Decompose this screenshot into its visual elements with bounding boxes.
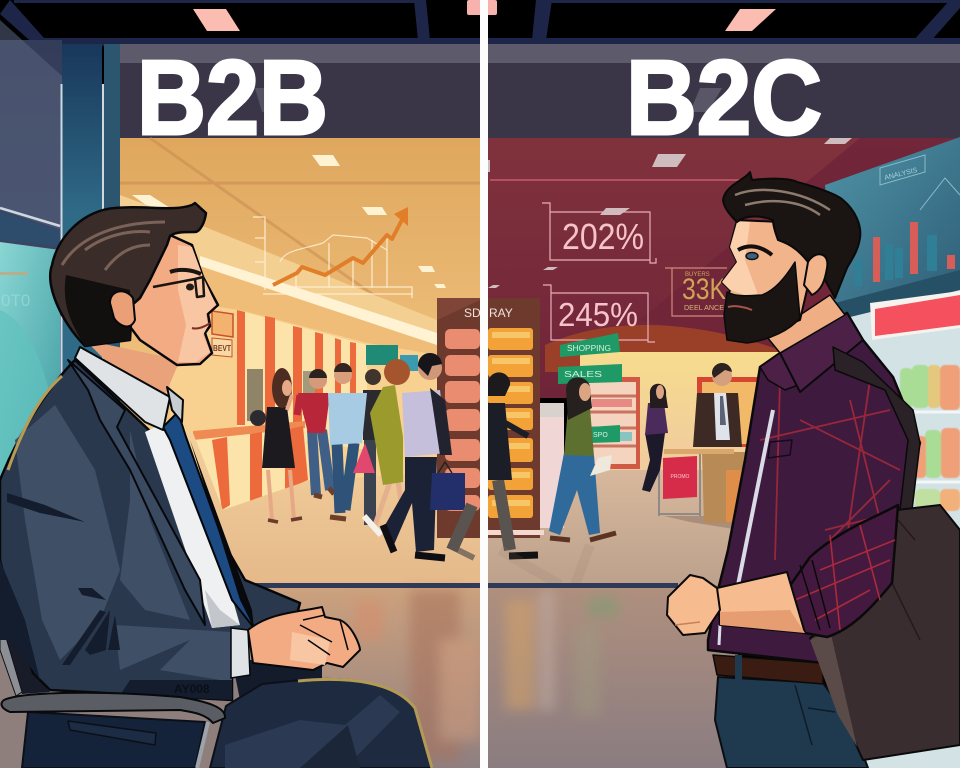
- man in light blue shirt: [328, 363, 367, 519]
- eye: [746, 252, 758, 260]
- floor: [120, 430, 480, 585]
- small shop sign lower: [212, 338, 232, 357]
- green tag 1: [560, 333, 620, 357]
- stand heading right: RAY: [489, 306, 513, 320]
- red promo stand: PROMO: [671, 474, 690, 480]
- woman in black dress: [250, 368, 302, 522]
- collar: [760, 353, 798, 390]
- plaid lines: [760, 320, 905, 620]
- ceiling light left: [193, 9, 240, 31]
- ear: [804, 254, 827, 295]
- mouth: [192, 323, 210, 329]
- jacket highlight shapes: [15, 405, 232, 682]
- seat lower: [22, 712, 205, 768]
- hair: [723, 172, 860, 298]
- stand heading left: SD: [464, 306, 481, 320]
- arched store soffit: [545, 325, 780, 372]
- green tag 2: SALES: [564, 370, 602, 379]
- stat box 245%: 245%: [558, 296, 638, 333]
- man in brown suit: [693, 363, 742, 447]
- stat box 202%: [542, 203, 656, 263]
- shirt torso: [708, 313, 920, 663]
- reception counter: [193, 423, 310, 510]
- green tag 2: [558, 364, 622, 384]
- sleeve: [787, 505, 898, 637]
- stat box 33K: DEEL ANCE: [684, 305, 724, 312]
- panel: left wall and window: [0, 20, 120, 768]
- woman in purple top: [642, 384, 668, 492]
- ceiling light right: [725, 9, 776, 31]
- chair back pad: [0, 555, 50, 694]
- blue column: [62, 44, 102, 604]
- beard: [724, 262, 800, 343]
- green tag 1: SHOPPING: [567, 344, 611, 353]
- panel: header sign strip: [120, 44, 960, 138]
- shoulder gold edge: [8, 376, 62, 470]
- ceiling light centre: [467, 0, 497, 15]
- lapel: [68, 360, 205, 625]
- ear: [110, 291, 135, 326]
- woman in olive top: [549, 377, 616, 540]
- hair: [50, 203, 206, 346]
- ceiling lamps: [486, 138, 852, 288]
- cuff: [231, 628, 250, 678]
- window faint digits: 0T0: [1, 291, 30, 310]
- ceiling beams: [120, 138, 480, 345]
- floor reflection panel left: [220, 585, 480, 768]
- jacket shadow folds: [0, 493, 232, 700]
- woman in olive dress: [353, 359, 410, 535]
- eye: [186, 284, 194, 290]
- ceiling: [120, 138, 480, 438]
- floor reflection panel right: [488, 545, 738, 768]
- man in lilac shirt with bag: [383, 353, 465, 558]
- heading: B2C: B2C: [626, 39, 822, 157]
- face: [125, 235, 218, 365]
- soffit underside: [120, 238, 480, 368]
- trousers: [715, 677, 868, 768]
- display stand with products: [437, 298, 544, 538]
- panel: B2B store interior: [120, 138, 480, 585]
- shoppers: B2B side: [250, 353, 465, 558]
- ceiling: [488, 138, 960, 398]
- screen with bar chart: ANALYSIS: [884, 167, 919, 182]
- column side strip: [104, 44, 120, 604]
- product rows left: [445, 329, 480, 511]
- stat box 202%: 202%: [562, 216, 644, 257]
- peach soffit band: [120, 195, 480, 352]
- booth dark doors: [247, 369, 263, 421]
- chest pocket: [768, 440, 792, 458]
- shoppers: B2C side: [448, 363, 742, 558]
- red promo stand: [659, 450, 740, 530]
- walker in dark jacket: [448, 372, 538, 558]
- green tag 3: [590, 425, 620, 443]
- stat box 245%: [543, 285, 655, 342]
- trousers: [210, 679, 432, 768]
- bag: [810, 505, 960, 760]
- armrest: [2, 693, 225, 723]
- shelf band: [835, 270, 960, 322]
- shirt collar: [75, 347, 183, 430]
- bright soffit stripe: [200, 256, 480, 356]
- line chart with rising arrow: [253, 207, 413, 298]
- shoulder bag strap: [833, 347, 920, 510]
- necktie: [163, 412, 254, 628]
- stat box 33K: [665, 268, 727, 316]
- glasses: [153, 277, 204, 297]
- stat box 33K: 33K: [682, 273, 726, 306]
- cardboard box counter: [664, 449, 746, 523]
- screen with bar chart: [825, 137, 960, 305]
- green tag 3: SPO: [593, 432, 608, 439]
- forearm: [717, 572, 805, 633]
- fist: [667, 575, 720, 635]
- refrigerated shelves: [838, 290, 960, 768]
- floor: [488, 470, 748, 585]
- ceiling lamps: [132, 155, 446, 288]
- dark lap behind hands: [232, 660, 322, 700]
- face: [722, 220, 815, 340]
- belt: [713, 655, 823, 684]
- neck: [767, 295, 845, 353]
- clasped hands: [248, 607, 360, 670]
- character: bearded man with bag: [667, 172, 960, 768]
- eyebrow: [170, 270, 201, 274]
- shelves right: [697, 377, 767, 447]
- lips: [728, 306, 752, 310]
- small shop sign upper: [212, 311, 233, 337]
- small shop sign lower: BEVT: [213, 344, 231, 353]
- display kiosk: [540, 403, 564, 528]
- man in red shirt: [297, 369, 334, 497]
- lit store back wall: [580, 352, 780, 482]
- eyebrow: [738, 246, 772, 255]
- heading: B2B: B2B: [137, 39, 328, 157]
- panel: top ceiling frame: [0, 0, 960, 46]
- chair back frame: [0, 617, 22, 696]
- floor edge line: [240, 583, 678, 588]
- shelves left: [583, 377, 640, 469]
- character: businessman: [0, 203, 432, 768]
- booth wall and columns: [237, 310, 367, 450]
- product rows right: [488, 328, 533, 518]
- store back wall: [170, 300, 480, 520]
- left lower background: [0, 600, 240, 768]
- stat box 33K: BUYERS: [685, 272, 710, 278]
- jacket body: [0, 360, 300, 700]
- centre divider: [480, 0, 488, 768]
- jacket label: AY008: [174, 682, 210, 696]
- man behind olive dress: [363, 369, 383, 525]
- shirt front: [145, 415, 240, 628]
- neck: [85, 340, 180, 395]
- panel: B2C store interior: [486, 137, 960, 768]
- shirt placket: [731, 410, 773, 590]
